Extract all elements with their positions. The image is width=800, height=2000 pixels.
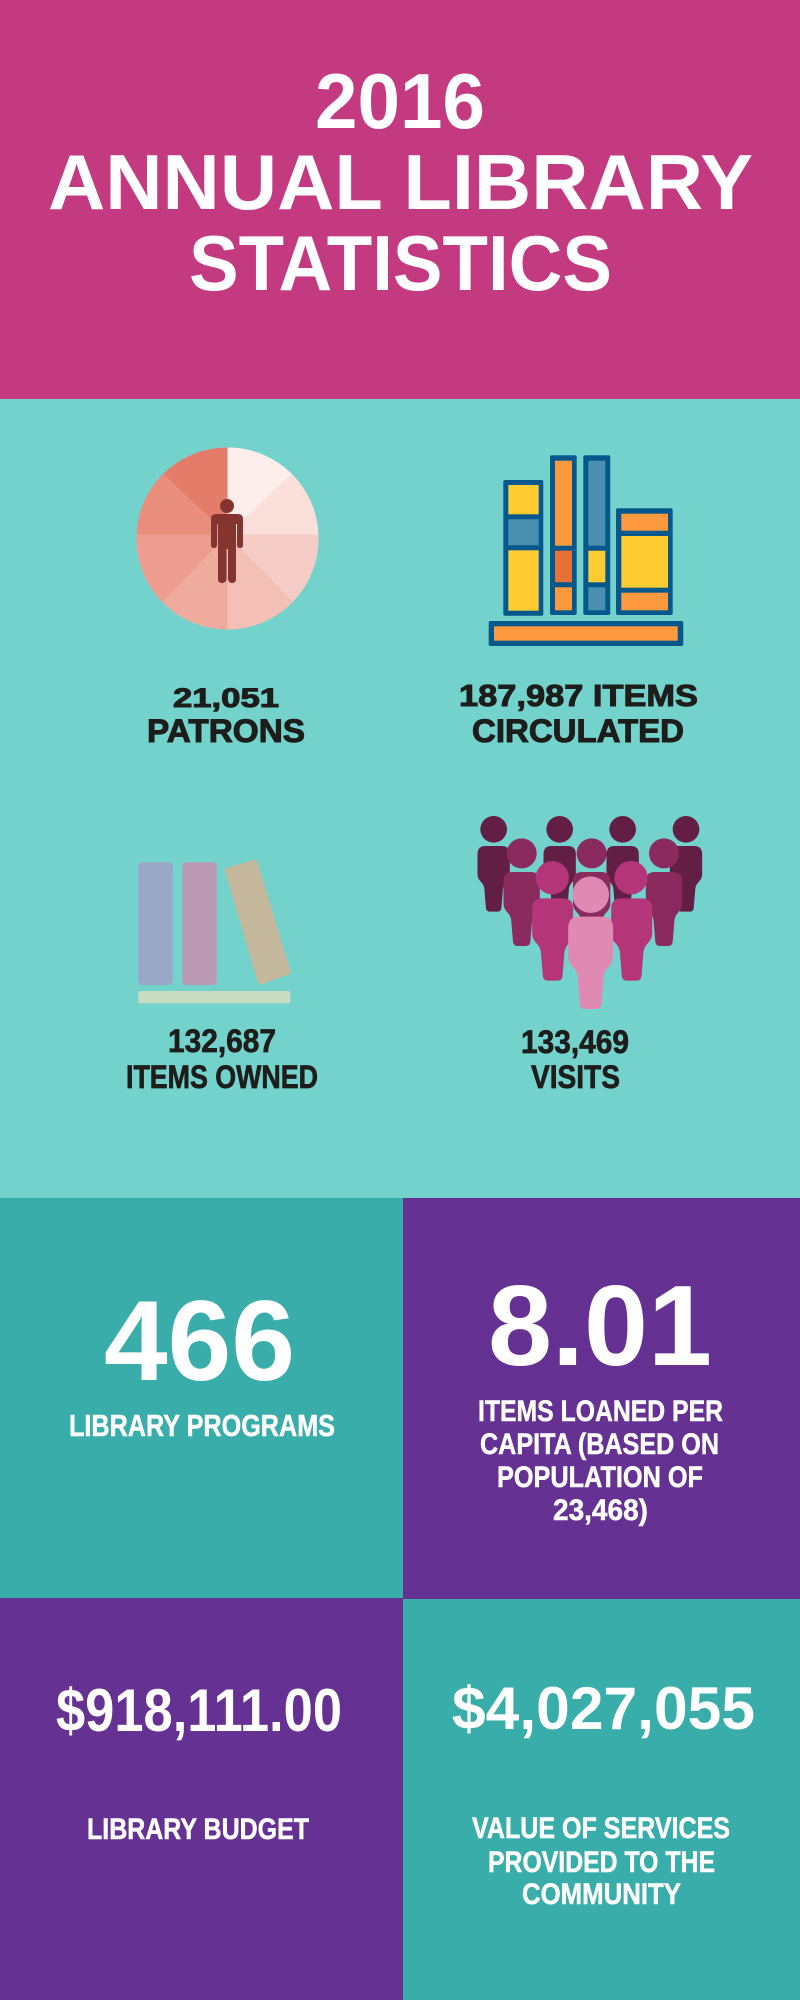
text: items circulated: CIRCULATED [472,713,684,749]
title: 2016 [315,57,485,145]
text: items owned: 132,687 [168,1023,276,1059]
panel: value of services [403,1599,800,2000]
text: items owned: ITEMS OWNED [126,1059,318,1095]
label: items loaned per capita: 23,468) [553,1494,648,1527]
panel: library budget [0,1598,403,2000]
text: visits [521,1024,629,1095]
text: patrons [147,683,305,749]
icon: patron in pie wheel [136,447,319,630]
label: value of services: PROVIDED TO THE [488,1846,715,1879]
panel: title banner [0,0,800,399]
text: items circulated [459,678,698,749]
icon: crowd of visitors [477,816,702,1009]
title [48,57,753,307]
panel: items loaned per capita [403,1198,800,1599]
label: value of services [472,1812,730,1911]
icon: colorful books on shelf [489,455,683,646]
label: value of services: VALUE OF SERVICES [472,1812,730,1845]
panel: library programs [0,1198,403,1598]
stat: budget amount: $918,111.00 [56,1677,342,1744]
label: library budget: LIBRARY BUDGET [87,1813,309,1846]
stat: value amount: $4,027,055 [452,1675,755,1742]
text: visits: 133,469 [521,1024,629,1060]
text: items owned [126,1023,318,1095]
stat: 466: 466 [104,1278,295,1405]
text: visits: VISITS [531,1059,620,1095]
stat: 8.01: 8.01 [488,1263,712,1390]
label: items loaned per capita: POPULATION OF [497,1461,703,1494]
label: library programs: LIBRARY PROGRAMS [69,1408,335,1443]
panel: library usage statistics [0,399,800,1198]
title: ANNUAL LIBRARY [48,138,753,226]
label: items loaned per capita [478,1395,723,1527]
label: items loaned per capita: ITEMS LOANED PER [478,1395,723,1428]
icon: pale books on shelf [138,860,291,1003]
text: patrons: 21,051 [173,683,279,713]
label: items loaned per capita: CAPITA (BASED ON [480,1428,719,1461]
title: STATISTICS [189,219,612,307]
text: items circulated: 187,987 ITEMS [459,678,698,713]
label: value of services: COMMUNITY [522,1878,681,1911]
text: patrons: PATRONS [147,713,305,749]
